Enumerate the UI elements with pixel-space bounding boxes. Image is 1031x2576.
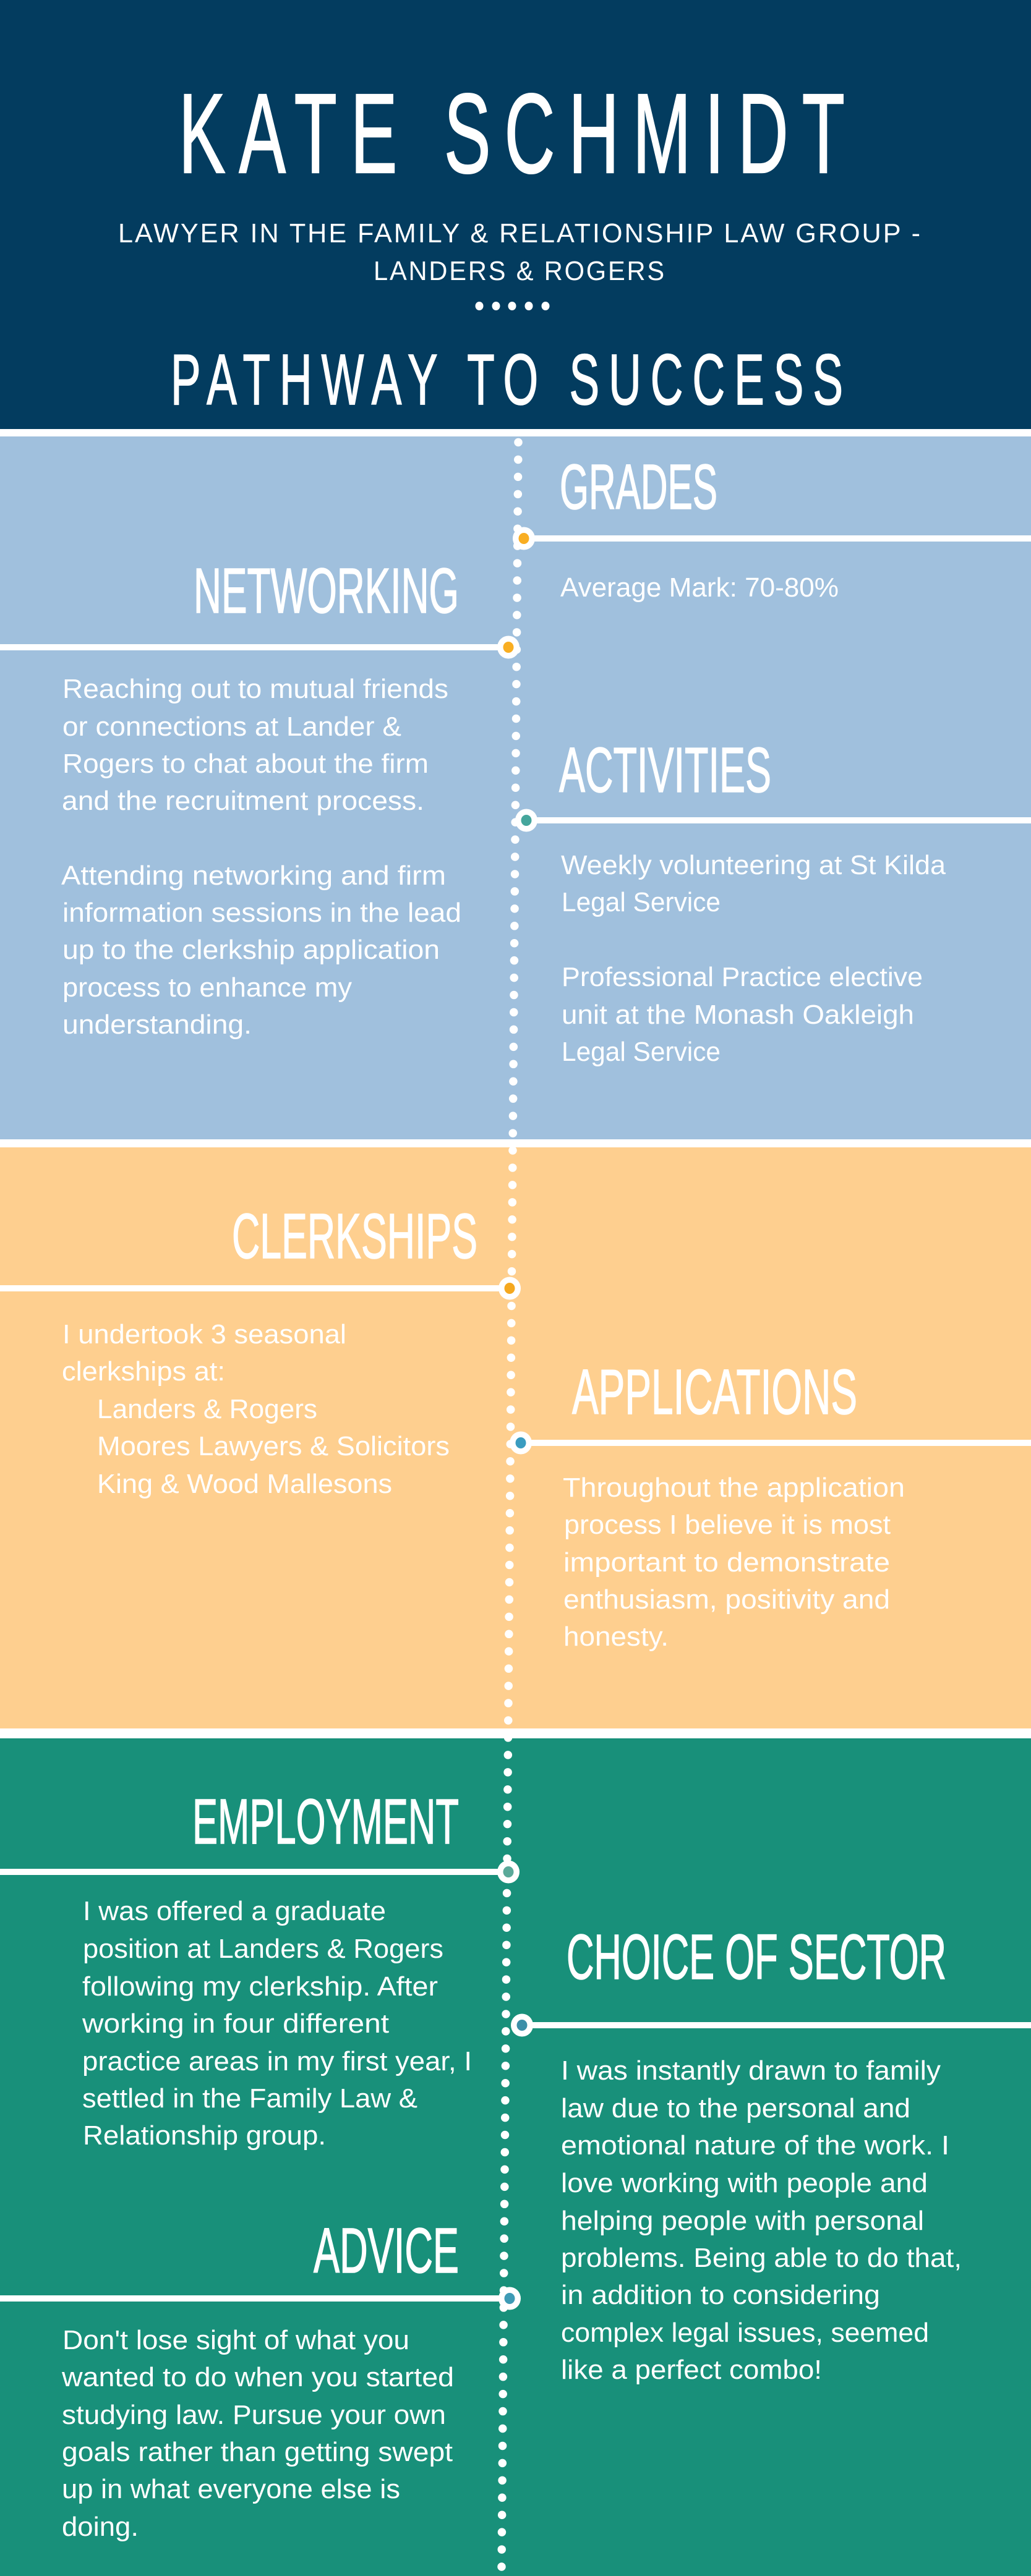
text: networking body: Reaching out to mutual friends: [62, 674, 448, 704]
text: clerkships body: clerkships at:: [62, 1356, 225, 1387]
text: activities body: Weekly volunteering at St Kilda: [561, 850, 946, 880]
heading: activities: ACTIVITIES: [559, 734, 771, 806]
connector: choice of sector: [511, 2014, 1031, 2036]
text: choice of sector body: love working with people and: [561, 2168, 928, 2198]
text: activities body: [561, 850, 946, 1067]
text: employment body: I was offered a graduate: [83, 1896, 386, 1926]
text: choice of sector body: problems. Being able to do that,: [561, 2243, 962, 2273]
text: clerkships body: [62, 1319, 450, 1499]
block: clerkships: [0, 1201, 521, 1499]
text: choice of sector body: like a perfect combo!: [561, 2355, 822, 2385]
text: applications body: enthusiasm, positivity and: [563, 1584, 890, 1615]
text: activities body: Legal Service: [562, 887, 721, 917]
panel: orange section background: [0, 1147, 1031, 1728]
text: networking body: process to enhance my: [62, 972, 352, 1003]
connector: advice: [0, 2287, 521, 2310]
text: choice of sector body: [561, 2055, 962, 2385]
connector: applications: [510, 1432, 1031, 1454]
text: applications body: honesty.: [563, 1622, 669, 1652]
heading: advice: ADVICE: [314, 2215, 459, 2286]
text: employment body: practice areas in my first year, I: [82, 2046, 472, 2077]
connector: networking: [0, 635, 520, 659]
text: clerkships body: Moores Lawyers & Solicitors: [97, 1431, 450, 1461]
text: average mark: Average Mark: 70-80%: [560, 572, 839, 603]
text: networking body: or connections at Lander &: [62, 712, 401, 742]
text: employment body: [82, 1896, 472, 2151]
heading: grades: GRADES: [560, 451, 717, 522]
connector: grades: [513, 527, 1031, 550]
text: clerkships body: King & Wood Mallesons: [97, 1469, 392, 1499]
text: networking body: and the recruitment process.: [62, 786, 424, 816]
text: networking body: Rogers to chat about the firm: [62, 749, 429, 779]
text: advice body: studying law. Pursue your own: [62, 2400, 446, 2430]
text: employment body: following my clerkship. After: [82, 1971, 438, 2002]
text: networking body: Attending networking and firm: [61, 861, 446, 891]
panel: green section background: [0, 1738, 1031, 2576]
text: networking body: [61, 674, 461, 1040]
block: networking: [0, 555, 520, 1040]
text: networking body: understanding.: [62, 1010, 252, 1040]
text: advice body: wanted to do when you started: [61, 2362, 454, 2392]
text: advice body: Don't lose sight of what you: [62, 2325, 409, 2355]
block: grades: [513, 451, 1031, 603]
connector: activities: [515, 809, 1031, 832]
text: applications body: Throughout the application: [563, 1473, 905, 1503]
connector: clerkships: [0, 1277, 521, 1299]
text: activities body: unit at the Monash Oakleigh: [562, 1000, 914, 1030]
text: applications body: process I believe it is most: [564, 1510, 891, 1540]
heading: clerkships: CLERKSHIPS: [232, 1201, 477, 1272]
block: employment: [0, 1786, 520, 2151]
heading: employment: EMPLOYMENT: [192, 1786, 459, 1857]
text: choice of sector body: law due to the personal and: [561, 2093, 910, 2123]
subtitle: [118, 218, 922, 286]
block: advice: [0, 2215, 521, 2542]
heading: applications: APPLICATIONS: [572, 1356, 857, 1427]
text: networking body: up to the clerkship application: [62, 935, 440, 965]
panel: header: [0, 0, 1031, 429]
text: employment body: Relationship group.: [83, 2120, 326, 2151]
text: networking body: information sessions in the lead: [62, 898, 461, 928]
text: applications body: important to demonstrate: [563, 1547, 890, 1578]
text: choice of sector body: complex legal issues, seemed: [561, 2318, 929, 2348]
text: activities body: Professional Practice elective: [562, 962, 923, 992]
text: employment body: settled in the Family Law &: [82, 2083, 417, 2114]
connector: employment: [0, 1861, 520, 1883]
block: applications: [510, 1356, 1031, 1652]
text: advice body: goals rather than getting swept: [62, 2437, 453, 2467]
text: activities body: Legal Service: [562, 1037, 721, 1067]
text: advice body: doing.: [62, 2512, 139, 2542]
text: clerkships body: Landers & Rogers: [97, 1394, 317, 1424]
dots divider: [475, 302, 549, 310]
text: employment body: position at Landers & Rogers: [83, 1934, 443, 1964]
dotted timeline: [502, 443, 518, 2567]
text: applications body: [563, 1473, 905, 1652]
subtitle: LANDERS & ROGERS: [374, 256, 666, 286]
text: choice of sector body: I was instantly drawn to family: [561, 2055, 941, 2086]
text: employment body: working in four different: [82, 2009, 389, 2039]
text: advice body: up in what everyone else is: [62, 2474, 400, 2504]
text: choice of sector body: in addition to considering: [561, 2280, 880, 2310]
panel: blue section background: [0, 436, 1031, 1139]
heading: networking: NETWORKING: [194, 555, 459, 626]
subtitle: LAWYER IN THE FAMILY & RELATIONSHIP LAW GROUP -: [118, 218, 922, 249]
block: choice of sector: [511, 1921, 1031, 2385]
text: choice of sector body: emotional nature of the work. I: [561, 2130, 949, 2161]
text: choice of sector body: helping people with personal: [561, 2206, 924, 2236]
text: advice body: [61, 2325, 454, 2542]
text: clerkships body: I undertook 3 seasonal: [62, 1319, 346, 1350]
block: activities: [515, 734, 1031, 1067]
